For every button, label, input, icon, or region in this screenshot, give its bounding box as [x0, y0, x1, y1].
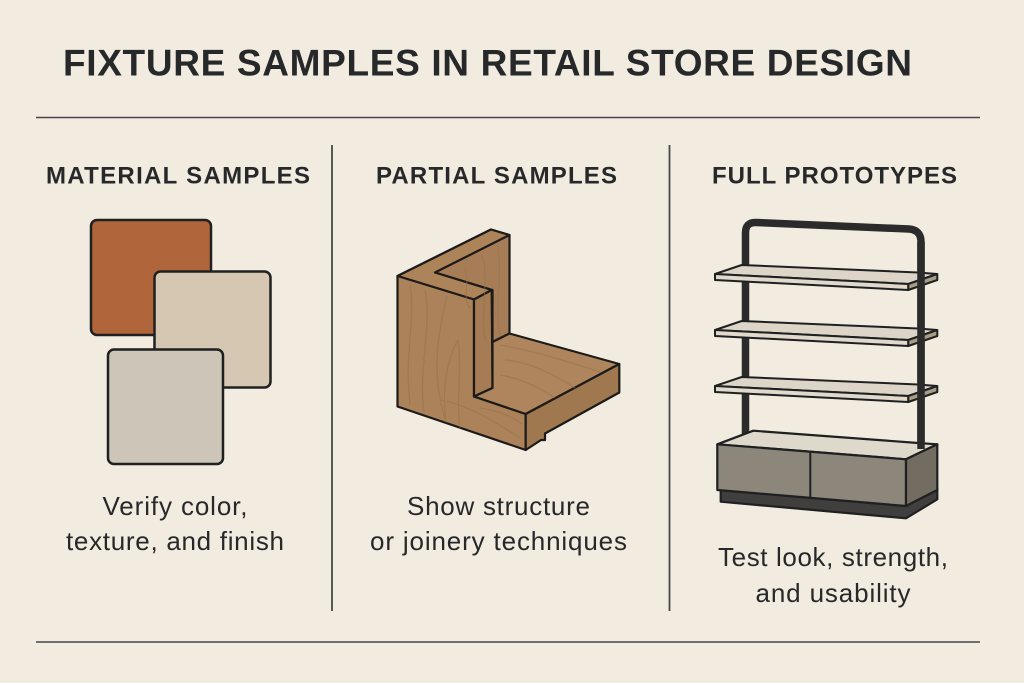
base plinth	[721, 488, 937, 518]
caption: full prototypes: and usability	[756, 578, 910, 608]
caption: full prototypes	[718, 542, 948, 608]
panel: material samples	[46, 162, 310, 556]
shelf 2	[715, 321, 937, 346]
caption: material samples: Verify color,	[102, 491, 248, 521]
caption: partial samples: or joinery techniques	[370, 526, 627, 556]
shelf 3	[715, 377, 937, 402]
heading: material samples: MATERIAL SAMPLES	[46, 162, 310, 190]
icon: shelving unit prototype	[715, 222, 937, 518]
base front doors	[717, 444, 906, 506]
caption: material samples: texture, and finish	[66, 526, 284, 556]
caption: material samples	[66, 491, 284, 556]
panel: partial samples	[370, 162, 627, 556]
shelf 1	[715, 265, 937, 290]
caption: partial samples	[370, 491, 627, 556]
heading: partial samples: PARTIAL SAMPLES	[376, 162, 617, 190]
right upright front	[917, 242, 925, 449]
base side	[906, 444, 937, 506]
icon: wood joinery sample	[398, 230, 619, 450]
icon: material swatches	[91, 220, 270, 464]
base top	[717, 431, 937, 459]
heading: full prototypes: FULL PROTOTYPES	[712, 162, 957, 190]
panel: full prototypes	[712, 162, 957, 608]
caption: partial samples: Show structure	[407, 491, 590, 521]
caption: full prototypes: Test look, strength,	[718, 542, 948, 572]
back upright frame	[746, 222, 921, 449]
title: FIXTURE SAMPLES IN RETAIL STORE DESIGN	[63, 42, 912, 84]
